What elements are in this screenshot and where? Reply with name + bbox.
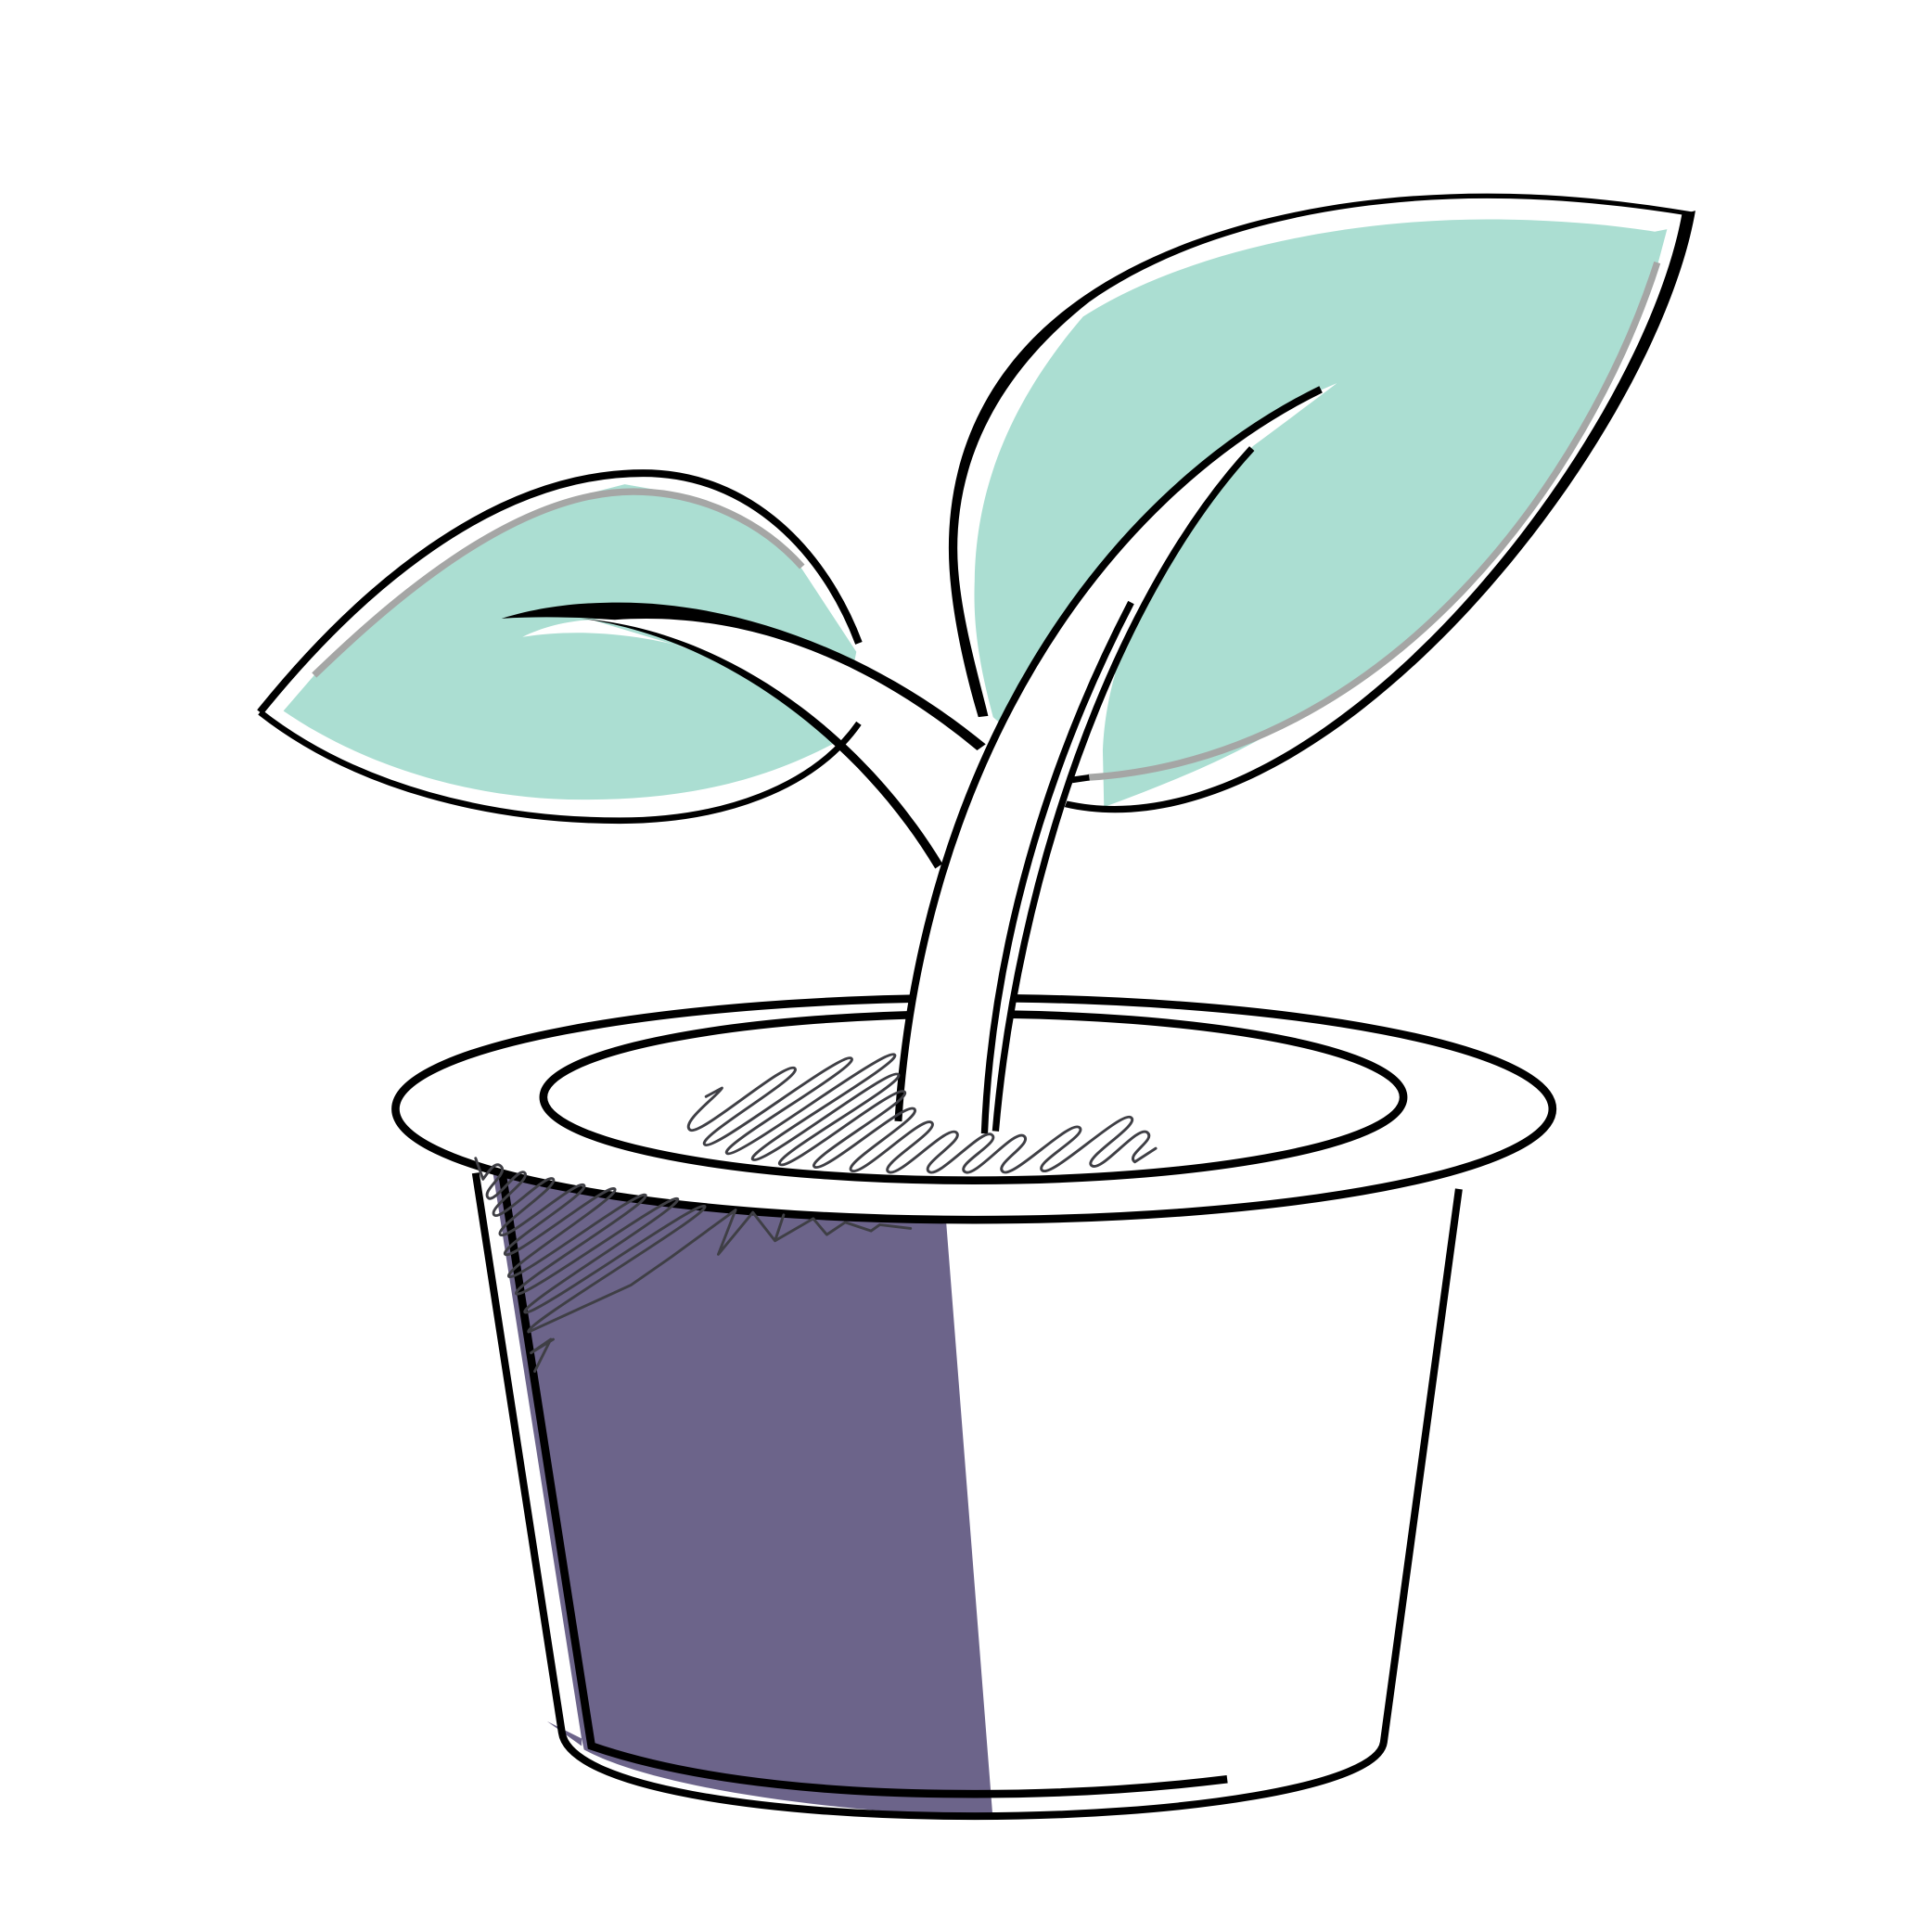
scribble: pot shading: [476, 1158, 911, 1372]
main stem: [898, 383, 1337, 1133]
short black vein start: [1072, 777, 1089, 780]
white wedge below branch: [522, 620, 714, 657]
stem white body: [898, 383, 1337, 1132]
right leaf teal fill: [975, 219, 1667, 807]
rim outer ellipse: [395, 998, 1553, 1220]
stem left line: [898, 390, 1321, 1121]
pot purple spur: [547, 1721, 582, 1746]
left leaf teal fill: [284, 484, 856, 800]
stem inner right line: [984, 603, 1132, 1133]
pot shadow fill: purple: [492, 1164, 992, 1813]
left branch lower stroke: [582, 619, 942, 869]
left branch: [260, 603, 986, 869]
right leaf grey vein: [1088, 262, 1657, 777]
rim inner opening: [544, 1014, 1403, 1181]
left leaf outline bottom and hook: [260, 712, 859, 821]
right leaf: [949, 194, 1695, 812]
pot inner thick line: [503, 1177, 1227, 1794]
right leaf outline right and bottom: [1065, 211, 1695, 812]
right leaf outline top and left: [949, 194, 1693, 717]
pot outer outline: [476, 1173, 1459, 1816]
left leaf grey vein: [314, 492, 802, 675]
left branch white body: [582, 617, 982, 866]
pot body: [476, 1164, 1459, 1816]
left leaf: [260, 473, 859, 800]
stem outer right line: [995, 449, 1252, 1132]
left leaf outline top: [260, 473, 859, 712]
pot rim: [395, 998, 1553, 1220]
scribble: soil: [688, 1055, 1156, 1172]
left branch top tapered stroke: [502, 603, 986, 750]
